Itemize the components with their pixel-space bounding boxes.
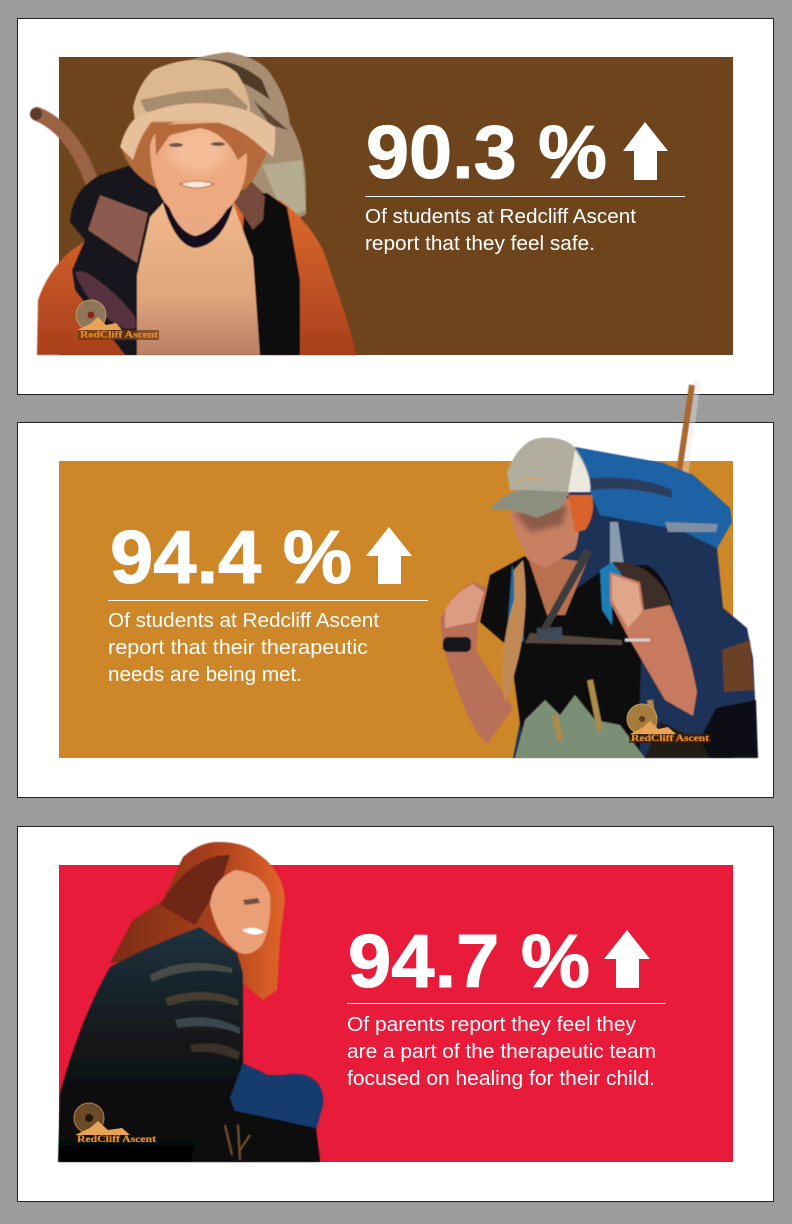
panel: therapeutic needs met (18, 380, 774, 798)
panel background: brown (59, 57, 733, 355)
logo: RedCliff Ascent (76, 300, 159, 340)
icon: up arrow (366, 527, 412, 584)
statistic: 94.7 %: 94.7 % (348, 919, 590, 1003)
panel background: amber (59, 461, 733, 758)
text: therapeutic needs: Of students at Redcliff Ascent (108, 609, 379, 632)
icon: up arrow (623, 122, 668, 180)
logo: RedCliff Ascent: RedCliff Ascent (80, 330, 159, 340)
divider rule (108, 600, 428, 601)
photo: smiling woman (58, 842, 323, 1162)
text: students feel safe: report that they feel safe. (365, 232, 595, 255)
text: parents on team: are a part of the therapeutic team (347, 1040, 656, 1063)
logo: RedCliff Ascent (74, 1103, 157, 1145)
text: parents on team: focused on healing for their child. (347, 1067, 655, 1090)
logo: RedCliff Ascent: RedCliff Ascent (631, 734, 710, 744)
panel: parents on therapeutic team (18, 826, 774, 1202)
panel background: red (59, 865, 733, 1162)
photo: girl with backpack (440, 380, 758, 758)
text: therapeutic needs: report that their therapeutic (108, 636, 368, 659)
icon: up arrow (604, 930, 650, 988)
statistic: 90.3 %: 90.3 % (366, 110, 607, 194)
text: students feel safe: Of students at Redcliff Ascent (365, 205, 636, 228)
text: parents on team: Of parents report they feel they (347, 1013, 637, 1036)
statistic: 94.4 %: 94.4 % (110, 515, 352, 599)
divider rule (347, 1003, 666, 1004)
photo: boy with backpack (30, 52, 357, 355)
panel: students feel safe (18, 18, 774, 394)
divider rule (365, 196, 685, 197)
logo: RedCliff Ascent: RedCliff Ascent (77, 1135, 157, 1145)
text: therapeutic needs: needs are being met. (108, 663, 302, 686)
logo: RedCliff Ascent (627, 704, 711, 744)
